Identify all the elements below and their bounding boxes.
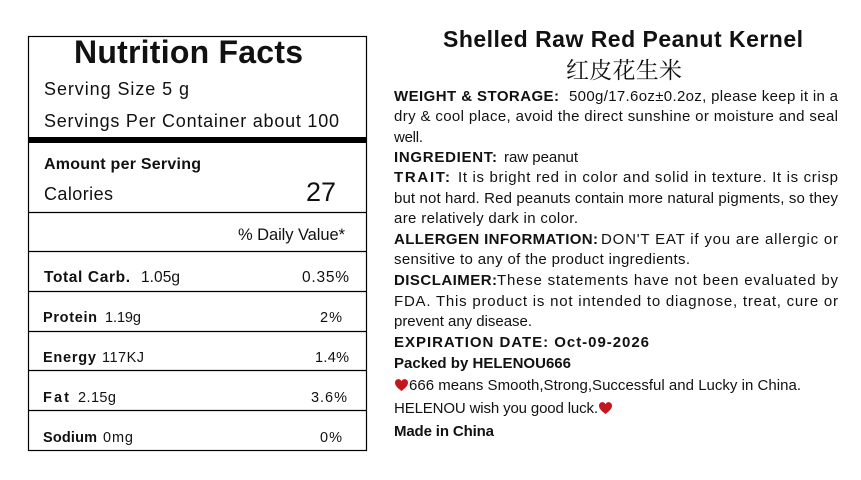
icon: heart [599, 402, 612, 414]
row: protein: 2% [320, 310, 342, 326]
row: sodium: Sodium [43, 430, 97, 446]
text block: allergen information: ALLERGEN INFORMATION: [394, 231, 598, 248]
text block: trait: TRAIT: [394, 169, 450, 186]
panel border [28, 36, 366, 450]
text block: disclaimer: DISCLAIMER: [394, 272, 497, 289]
text block: allergen information [394, 231, 838, 268]
packed by: Packed by HELENOU666 [394, 355, 571, 372]
calories label: Calories [44, 184, 113, 204]
row: energy: 117KJ [102, 350, 144, 366]
text block: trait [394, 169, 838, 227]
panel: nutrition facts [28, 34, 367, 450]
row: protein [43, 310, 342, 326]
text block: disclaimer: These statements have not been evaluated by [497, 272, 838, 289]
row: fat: 3.6% [311, 390, 347, 406]
text block: disclaimer: FDA. This product is not intended to diagnose, treat, cure or [394, 293, 838, 310]
row: energy: Energy [43, 350, 96, 366]
row: protein: Protein [43, 310, 97, 326]
text block: allergen information: sensitive to any of the product ingredients. [394, 251, 690, 268]
calories value: 27 [306, 177, 336, 207]
text block: ingredient [394, 149, 579, 166]
text block: ingredient: raw peanut [504, 149, 579, 166]
heading: Nutrition Facts: Nutrition Facts [74, 34, 303, 70]
row: total carb: 1.05g [141, 269, 180, 286]
text block: trait: It is bright red in color and solid in texture. It is crisp [458, 169, 838, 186]
row: energy: 1.4% [315, 350, 349, 366]
text block: trait: are relatively dark in color. [394, 210, 578, 227]
text block: disclaimer [394, 272, 838, 330]
servings per container: Servings Per Container about 100 [44, 111, 339, 131]
icon: heart [395, 379, 408, 391]
made in china: Made in China [394, 423, 495, 440]
row: energy [43, 350, 349, 366]
row: fat: 2.15g [78, 390, 116, 406]
text block: disclaimer: prevent any disease. [394, 313, 532, 330]
666 meaning: 666 means Smooth,Strong,Successful and Lucky in China. [409, 377, 801, 394]
row: total carb: Total Carb. [44, 269, 130, 286]
text block: allergen information: DON'T EAT if you are allergic or [601, 231, 838, 248]
row: sodium [43, 430, 342, 446]
text block: ingredient: INGREDIENT: [394, 149, 497, 166]
amount per serving: Amount per Serving [44, 156, 201, 173]
row: sodium: 0% [320, 430, 342, 446]
row: total carb: 0.35% [302, 269, 349, 286]
row: fat [43, 390, 347, 406]
chinese title: 红皮花生米 [566, 52, 682, 85]
row: sodium: 0mg [103, 430, 133, 446]
text block: trait: but not hard. Red peanuts contain more natural pigments, so they [394, 190, 838, 207]
text block: weight and storage: well. [393, 129, 423, 146]
serving size: Serving Size 5 g [44, 79, 189, 99]
text block: weight and storage [393, 88, 839, 146]
expiration date: EXPIRATION DATE: Oct-09-2026 [394, 334, 649, 351]
text block: weight and storage: dry & cool place, avoid the direct sunshine or moisture and seal [394, 108, 838, 125]
row: protein: 1.19g [105, 310, 141, 326]
product title: Shelled Raw Red Peanut Kernel [443, 26, 803, 52]
text block: weight and storage: 500g/17.6oz±0.2oz, please keep it in a [569, 88, 839, 105]
row: total carb [44, 269, 349, 286]
daily value header: % Daily Value* [238, 226, 346, 244]
row: fat: Fat [43, 390, 69, 406]
text block: weight and storage: WEIGHT & STORAGE: [394, 88, 559, 105]
good luck wish: HELENOU wish you good luck. [394, 400, 598, 417]
